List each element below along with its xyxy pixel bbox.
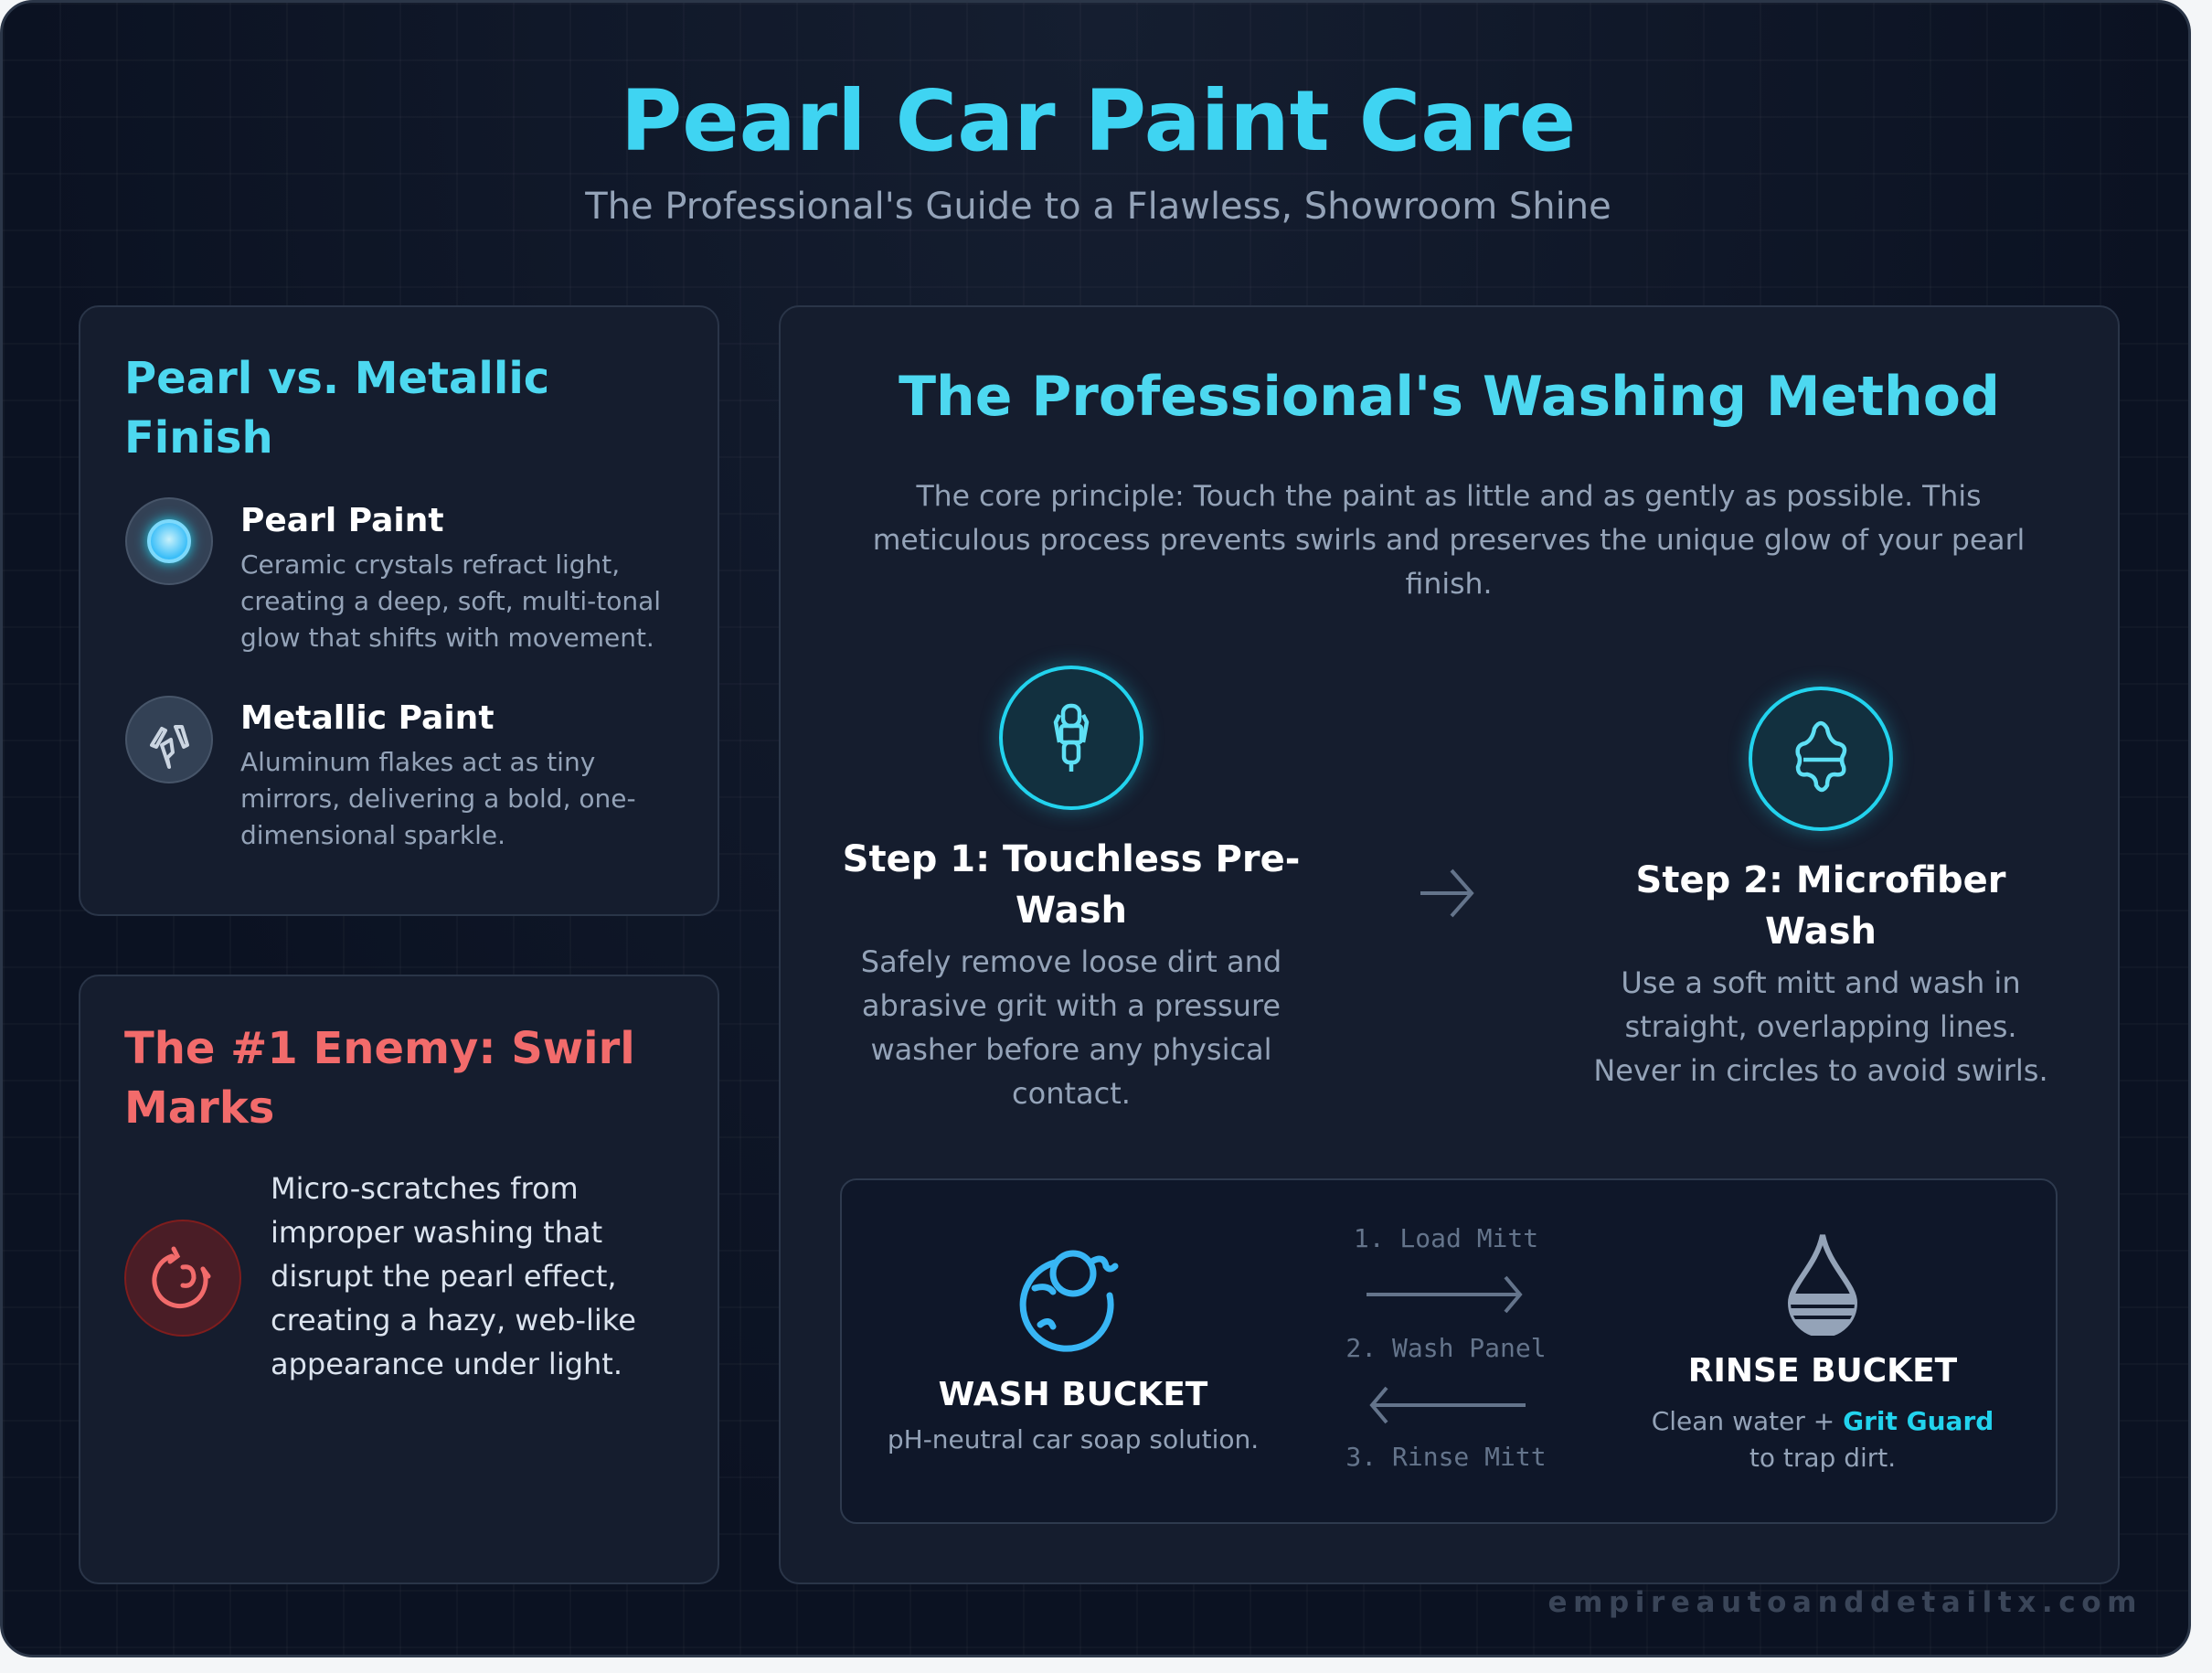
- step 2 title: Wash: [1765, 911, 1877, 953]
- text: pearl paint: [240, 502, 661, 653]
- step 1: [843, 655, 1300, 1111]
- two-bucket box: [840, 1178, 2058, 1524]
- wash bucket label: WASH BUCKET: [939, 1376, 1207, 1413]
- step 2 title: [1636, 859, 2005, 953]
- subtitle: The Professional's Guide to a Flawless, Showroom Shine: [585, 186, 1611, 228]
- text: metallic paint: [240, 699, 636, 850]
- arrow: step 1 to 2: [1420, 868, 1473, 918]
- title: Pearl Car Paint Care: [621, 72, 1576, 170]
- panel: swirl marks: [79, 975, 719, 1584]
- flow labels: 1. Load Mitt: [1354, 1223, 1538, 1253]
- intro paragraph: The core principle: Touch the paint as little and as gently as possible. This meticulous process prevents swirls and preserves the unique glow of your pearl finish.: [873, 480, 2025, 601]
- heading: washing method: The Professional's Washing Method: [899, 365, 2000, 429]
- text: metallic paint: Metallic Paint: [240, 699, 495, 737]
- icon: metallic: [125, 696, 213, 783]
- wash bucket: [888, 1251, 1259, 1455]
- rinse bucket text: to trap dirt.: [1749, 1443, 1896, 1473]
- icon: microfiber mitt: [1749, 687, 1893, 831]
- step 2 text: Use a soft mitt and wash in straight, overlapping lines. Never in circles to avoid swirls.: [1593, 965, 2048, 1088]
- panel: washing method: [779, 305, 2120, 1584]
- icon: swirl: [124, 1220, 241, 1337]
- text: swirl description: Micro-scratches from improper washing that disrupt the pearl effect, creating a hazy, web-like appearance under light.: [271, 1171, 636, 1381]
- wash bucket text: pH-neutral car soap solution.: [888, 1424, 1259, 1455]
- text: pearl paint: Pearl Paint: [240, 502, 444, 539]
- heading: pearl vs metallic: Finish: [124, 412, 273, 464]
- rinse bucket label: RINSE BUCKET: [1688, 1352, 1957, 1390]
- icon: pearl: [125, 497, 213, 585]
- rinse bucket text: Clean water + Grit Guard: [1652, 1406, 1994, 1436]
- flow labels: [1345, 1223, 1547, 1472]
- flow labels: 3. Rinse Mitt: [1345, 1442, 1547, 1472]
- flow labels: 2. Wash Panel: [1345, 1333, 1547, 1363]
- rinse bucket: [1652, 1234, 1994, 1473]
- heading: pearl vs metallic: Pearl vs. Metallic: [124, 353, 549, 404]
- icon: water drop: [1788, 1234, 1857, 1336]
- step 2 title: Step 2: Microfiber: [1636, 859, 2005, 901]
- heading: enemy: [124, 1023, 635, 1134]
- panel: pearl vs metallic: [79, 305, 719, 916]
- text: metallic paint: Aluminum flakes act as tiny mirrors, delivering a bold, one-dimensional sparkle.: [240, 747, 636, 850]
- text: pearl paint: Ceramic crystals refract light, creating a deep, soft, multi-tonal glow that shifts with movement.: [240, 549, 661, 653]
- icon: pressure washer: [999, 666, 1143, 810]
- heading: enemy: Marks: [124, 1082, 274, 1134]
- arrow: left: [1369, 1386, 1526, 1424]
- step 2: [1593, 677, 2048, 1088]
- step 1 text: Safely remove loose dirt and abrasive grit with a pressure washer before any physical contact.: [861, 944, 1281, 1111]
- step 1 title: Step 1: Touchless Pre-Wash: [843, 838, 1300, 932]
- heading: enemy: The #1 Enemy: Swirl: [124, 1023, 635, 1074]
- arrow: right: [1367, 1276, 1523, 1313]
- footer url: empireautoanddetailtx.com: [1547, 1586, 2143, 1619]
- icon: wash bucket: [1020, 1251, 1119, 1352]
- heading: pearl vs metallic: [124, 353, 549, 464]
- rinse bucket text: [1652, 1406, 1994, 1473]
